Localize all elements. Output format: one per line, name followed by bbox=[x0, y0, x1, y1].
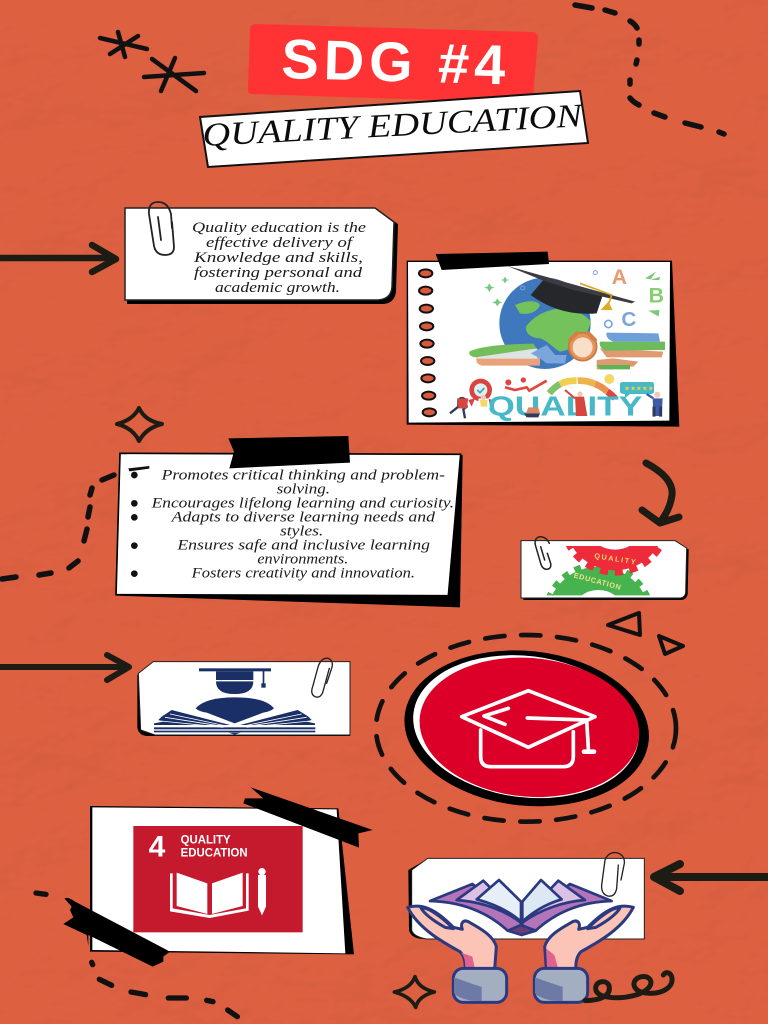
bullet text: environments. bbox=[257, 551, 348, 567]
decoration: top-right dashed curve bbox=[575, 5, 724, 134]
icon: paper clip bbox=[312, 658, 332, 697]
illustration: letters A B C: C bbox=[621, 308, 636, 331]
decoration: bottom-left dashes bbox=[36, 893, 237, 1017]
emblem: graduation cap circle bbox=[376, 635, 676, 822]
arrow: curved down bbox=[642, 463, 679, 523]
icon: mortarboard bbox=[462, 691, 595, 767]
bullet text: Adapts to diverse learning needs and bbox=[170, 510, 436, 526]
illustration: sparkles bbox=[484, 271, 660, 328]
illustration: books right bbox=[597, 333, 665, 369]
bullet text: Encourages lifelong learning and curiosity. bbox=[150, 495, 454, 511]
illustration: letters A B C bbox=[612, 265, 664, 331]
illustration: rosette and chart: ★★★★★ bbox=[624, 384, 654, 392]
bullet text: Promotes critical thinking and problem- bbox=[160, 467, 445, 483]
definition text: academic growth. bbox=[215, 280, 340, 296]
illustration: graduation cap bbox=[507, 266, 635, 314]
gear labels: QUALITY bbox=[594, 551, 636, 567]
panel: definition note bbox=[125, 202, 398, 304]
decoration: diamond star upper bbox=[117, 408, 162, 441]
panel: graduate reader note bbox=[137, 658, 350, 736]
panel: SDG 4 card bbox=[63, 787, 373, 967]
icon: paper clip bbox=[535, 537, 551, 569]
definition text: fostering personal and bbox=[194, 265, 363, 281]
dashed ring bbox=[376, 635, 676, 822]
illustration: green gear bbox=[546, 563, 650, 596]
icon: graduate with book bbox=[154, 668, 315, 735]
arrow: middle left bbox=[0, 655, 129, 680]
SDG 4 tile: QUALITY bbox=[181, 833, 231, 846]
icon: paper clip bbox=[602, 853, 624, 896]
SDG 4 tile: 4 bbox=[149, 831, 166, 864]
panel: gears note bbox=[520, 536, 689, 600]
SDG 4 tile: EDUCATION bbox=[181, 847, 248, 860]
bullet text: styles. bbox=[280, 523, 323, 539]
arrow: bottom right bbox=[654, 864, 768, 891]
notebook holes bbox=[419, 269, 436, 416]
illustration: right hand bbox=[534, 906, 633, 1002]
tape bottom left bbox=[63, 898, 170, 967]
decoration: diamond star lower bbox=[394, 977, 434, 1007]
subtitle strip: Quality Education: QUALITY EDUCATION bbox=[202, 98, 585, 154]
illustration: open book bbox=[430, 880, 612, 935]
panel: benefits list bbox=[116, 436, 463, 607]
illustration: red gear bbox=[566, 546, 662, 576]
illustration: quality gauge bbox=[549, 381, 615, 398]
decoration: scribble bbox=[585, 973, 672, 1001]
icon: paper clip bbox=[149, 202, 174, 255]
panel: gears note: EDUCATION bbox=[573, 571, 622, 592]
decoration: asterisk stars bbox=[100, 32, 204, 91]
icon: open book and pencil bbox=[170, 868, 266, 918]
definition text: Quality education is the bbox=[192, 220, 367, 236]
decoration: left dashed curve bbox=[2, 475, 114, 579]
white disc bbox=[405, 643, 647, 811]
tape bbox=[228, 436, 350, 468]
illustration: people bbox=[450, 390, 663, 418]
title banner: SDG #4 bbox=[248, 24, 538, 103]
illustration: books left bbox=[469, 344, 567, 366]
bullet marks bbox=[128, 466, 149, 577]
tape top right bbox=[243, 787, 373, 848]
arrow: top left bbox=[0, 245, 116, 272]
illustration: left hand bbox=[408, 906, 507, 1002]
bullet text bbox=[150, 467, 454, 581]
black shadow bbox=[397, 639, 657, 818]
decoration: triangles bbox=[608, 613, 683, 654]
illustration: rosette and chart bbox=[468, 374, 654, 407]
SDG 4 tile bbox=[133, 826, 303, 932]
illustration: alarm clock bbox=[569, 333, 597, 361]
definition text: effective delivery of bbox=[206, 235, 355, 251]
title banner: SDG #4: SDG #4 bbox=[281, 27, 506, 96]
illustration: QUALITY word: QUALITY bbox=[487, 390, 643, 421]
definition text bbox=[192, 220, 367, 296]
definition text: Knowledge and skills, bbox=[193, 250, 363, 266]
panel: open book in hands bbox=[394, 853, 672, 1007]
illustration: globe bbox=[499, 278, 591, 369]
tape bbox=[436, 252, 549, 270]
bullet text: Fosters creativity and innovation. bbox=[191, 565, 415, 581]
panel: notebook with quality illustration bbox=[407, 252, 679, 427]
bullet text: solving. bbox=[277, 481, 330, 497]
illustration: letters A B C: A bbox=[612, 265, 627, 289]
bullet text: Ensures safe and inclusive learning bbox=[176, 537, 430, 553]
illustration: letters A B C: B bbox=[649, 283, 664, 307]
subtitle strip: Quality Education bbox=[200, 91, 588, 167]
red disc bbox=[414, 649, 645, 806]
